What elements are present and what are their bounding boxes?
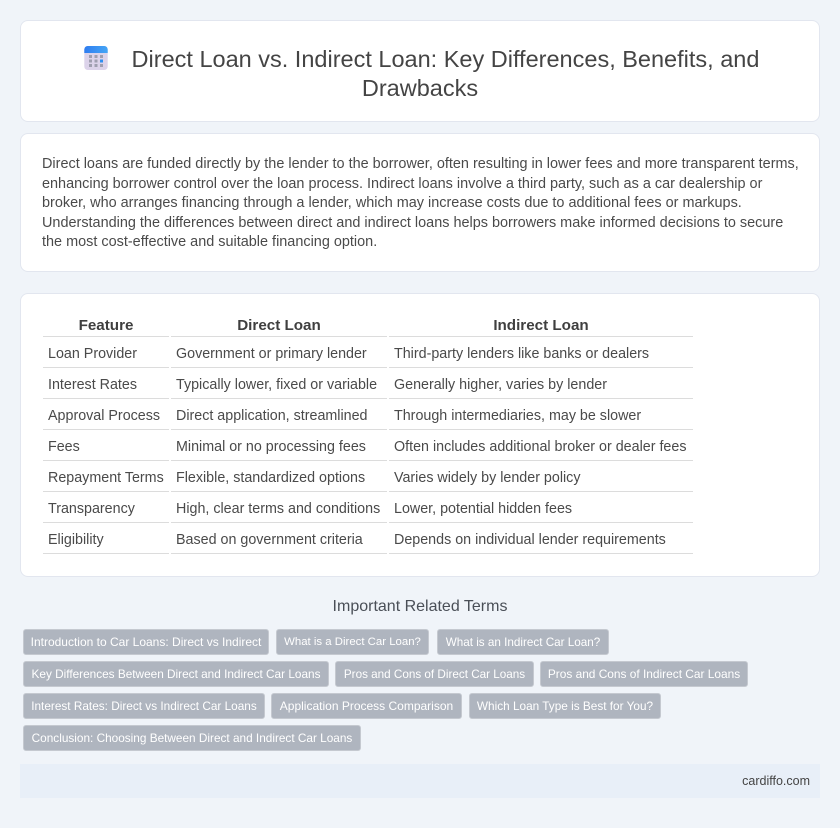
related term tags: Pros and Cons of Indirect Car Loans [548, 667, 740, 681]
comparison table: Fees [48, 439, 80, 455]
related term tags: Conclusion: Choosing Between Direct and Indirect Car Loans [32, 731, 352, 745]
comparison table: Lower, potential hidden fees [394, 501, 572, 517]
comparison table panel [20, 293, 820, 577]
comparison table: Generally higher, varies by lender [394, 377, 607, 393]
related term tags: What is an Indirect Car Loan? [446, 636, 600, 649]
comparison table: Through intermediaries, may be slower [394, 408, 641, 424]
intro text panel [20, 133, 820, 272]
header card [20, 20, 820, 122]
table header [79, 317, 589, 334]
intro paragraph [42, 156, 799, 250]
title: Drawbacks [362, 75, 478, 101]
comparison table: Varies widely by lender policy [394, 470, 580, 486]
comparison table: Transparency [48, 501, 135, 517]
icon: calendar [84, 46, 108, 70]
comparison table: Based on government criteria [176, 532, 363, 548]
footer source: cardiffo.com [742, 774, 810, 788]
comparison table: High, clear terms and conditions [176, 501, 380, 517]
comparison table: Direct application, streamlined [176, 408, 368, 424]
title [132, 46, 759, 101]
comparison table: Flexible, standardized options [176, 470, 365, 486]
row: loan provider [48, 346, 649, 362]
row: fees [48, 439, 686, 455]
comparison table: Loan Provider [48, 346, 137, 362]
comparison table: Approval Process [48, 408, 160, 424]
intro paragraph: Direct loans are funded directly by the lender to the borrower, often resulting in lower fees and more transparent terms, [42, 156, 799, 172]
row: approval process [48, 408, 641, 424]
related term tags: What is a Direct Car Loan? [284, 636, 421, 648]
intro paragraph: Understanding the differences between direct and indirect loans helps borrowers make informed decisions to secure [42, 214, 783, 230]
footer bar [20, 764, 820, 798]
intro paragraph: enhancing borrower control over the loan process. Indirect loans involve a third party, such as a car dealership or [42, 176, 762, 192]
related term tags: Application Process Comparison [280, 699, 453, 713]
related term tags: Which Loan Type is Best for You? [477, 699, 653, 713]
related term tags [23, 629, 748, 751]
comparison table: Typically lower, fixed or variable [176, 377, 377, 393]
related term tags: Pros and Cons of Direct Car Loans [344, 668, 525, 681]
row: interest rates [48, 377, 607, 393]
row: eligibility [48, 532, 666, 548]
comparison table: Interest Rates [48, 377, 137, 393]
related term tags: Interest Rates: Direct vs Indirect Car Loans [31, 699, 257, 713]
related term tags: Key Differences Between Direct and Indirect Car Loans [32, 667, 320, 681]
row: repayment terms [48, 470, 580, 486]
comparison table: Eligibility [48, 532, 104, 548]
comparison table: Depends on individual lender requirements [394, 532, 666, 548]
comparison table: Indirect Loan [493, 317, 589, 334]
row: transparency [48, 501, 572, 517]
comparison table: Often includes additional broker or dealer fees [394, 439, 686, 455]
comparison table: Third-party lenders like banks or dealers [394, 346, 649, 362]
comparison table: Government or primary lender [176, 346, 367, 362]
title: Direct Loan vs. Indirect Loan: Key Differences, Benefits, and [132, 46, 759, 72]
comparison table: Direct Loan [237, 317, 321, 334]
related terms heading: Important Related Terms [333, 598, 507, 615]
intro paragraph: broker, who arranges financing through a lender, which may increase costs due to additional fees or markups. [42, 195, 742, 211]
comparison table: Repayment Terms [48, 470, 164, 486]
intro paragraph: the most cost-effective and suitable financing option. [42, 234, 377, 250]
comparison table: Minimal or no processing fees [176, 439, 366, 455]
related term tags: Introduction to Car Loans: Direct vs Indirect [31, 635, 261, 649]
comparison table: Feature [79, 317, 133, 334]
